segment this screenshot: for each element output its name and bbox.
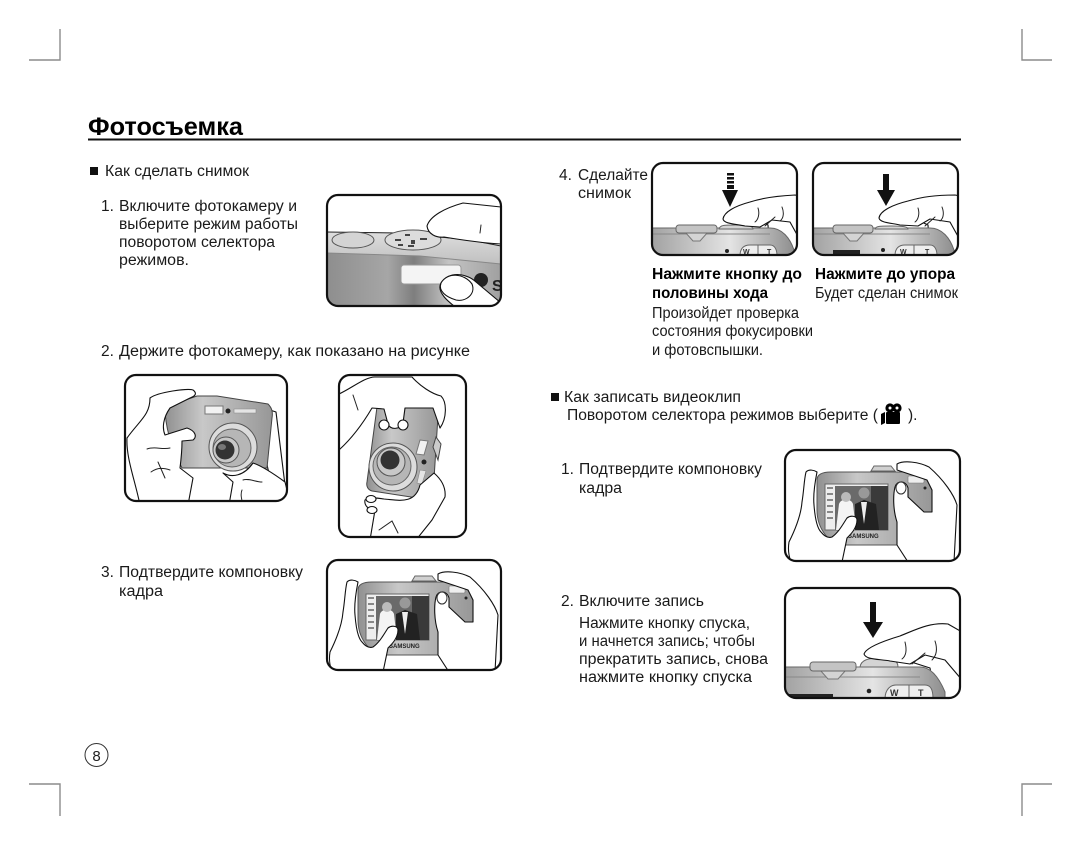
- step 1 text: 1.: [101, 198, 114, 215]
- step 2 text: 2.: [101, 343, 114, 360]
- section heading: recording a video clip: Как записать видеоклип: [564, 389, 741, 406]
- step 4 text: снимок: [578, 185, 631, 202]
- video step 2 text: прекратить запись, снова: [579, 651, 768, 668]
- step 4 text: [559, 167, 648, 202]
- panel: mode dial on camera top: S: [492, 278, 503, 295]
- video step 2 text: Нажмите кнопку спуска,: [579, 615, 750, 632]
- video step 1 text: Подтвердите компоновку: [579, 461, 762, 478]
- step 1 text: режимов.: [119, 252, 189, 269]
- half press caption: половины хода: [652, 285, 768, 302]
- video step 1 text: кадра: [579, 480, 622, 497]
- panel: shutter press to record: W: [890, 688, 899, 698]
- video step 2 text: и начнется запись; чтобы: [579, 633, 755, 650]
- video step 2 text: нажмите кнопку спуска: [579, 669, 752, 686]
- step 3 text: кадра: [119, 583, 163, 600]
- full press caption: Будет сделан снимок: [815, 285, 958, 302]
- video step 2 text: 2.: [561, 593, 574, 610]
- half press caption: Нажмите кнопку до: [652, 266, 802, 283]
- panel: vertical camera grip: [340, 376, 446, 536]
- panel 6 border: [813, 163, 958, 255]
- panel 1 border: [327, 195, 501, 306]
- panel: framing on LCD, left: [328, 571, 499, 669]
- icon: movie camera: [881, 403, 902, 425]
- panel: shutter press to record: [786, 602, 959, 697]
- half press caption: [652, 266, 813, 359]
- section heading: taking a photo: Как сделать снимок: [105, 163, 249, 180]
- panel: full press shutter: W: [900, 249, 907, 256]
- panel 7 border: [785, 450, 960, 561]
- video step 2 text: [561, 593, 768, 686]
- panel: half press shutter: T: [767, 249, 772, 256]
- panel: half press shutter: [653, 173, 796, 254]
- step 3 text: Подтвердите компоновку: [119, 564, 303, 581]
- half press caption: состояния фокусировки: [652, 323, 813, 340]
- step 3 text: [101, 564, 303, 600]
- title: Фотосъемка: [88, 113, 244, 141]
- full press caption: Нажмите до упора: [815, 266, 955, 283]
- half press caption: и фотовспышки.: [652, 342, 763, 359]
- step 1 text: [101, 198, 298, 269]
- section heading: recording a video clip: ).: [908, 407, 917, 424]
- panel: full press shutter: T: [925, 249, 930, 256]
- panel: shutter press to record: T: [918, 688, 924, 698]
- step 4 text: Сделайте: [578, 167, 648, 184]
- step 3 text: 3.: [101, 564, 114, 581]
- page number: 8: [92, 748, 101, 765]
- panel 4 border: [327, 560, 501, 670]
- panel: framing on LCD, left: SAMSUNG: [389, 644, 420, 650]
- panel: framing on LCD, right: SAMSUNG: [848, 534, 879, 540]
- section heading: recording a video clip: Поворотом селектора режимов выберите (: [567, 407, 879, 424]
- panel 5 border: [652, 163, 797, 255]
- full press caption: [815, 266, 958, 302]
- panel: horizontal camera grip: [126, 388, 286, 500]
- half press caption: Произойдет проверка: [652, 305, 799, 322]
- video step 2 text: Включите запись: [579, 593, 704, 610]
- step 1 text: Включите фотокамеру и: [119, 198, 297, 215]
- page number: [85, 744, 108, 766]
- step 1 text: поворотом селектора: [119, 234, 275, 251]
- panel: full press shutter: [814, 174, 957, 254]
- video step 1 text: 1.: [561, 461, 574, 478]
- step 1 text: выберите режим работы: [119, 216, 298, 233]
- panel: half press shutter: W: [743, 249, 750, 256]
- step 2 text: Держите фотокамеру, как показано на рисунке: [119, 343, 470, 360]
- panel: framing on LCD, right: [788, 461, 958, 560]
- section heading: recording a video clip: [551, 389, 917, 424]
- step 4 text: 4.: [559, 167, 572, 184]
- panel 2 border: [125, 375, 287, 501]
- video step 1 text: [561, 461, 762, 497]
- panel 3 border: [339, 375, 466, 537]
- panel 8 border: [785, 588, 960, 698]
- panel: mode dial on camera top: [328, 202, 500, 305]
